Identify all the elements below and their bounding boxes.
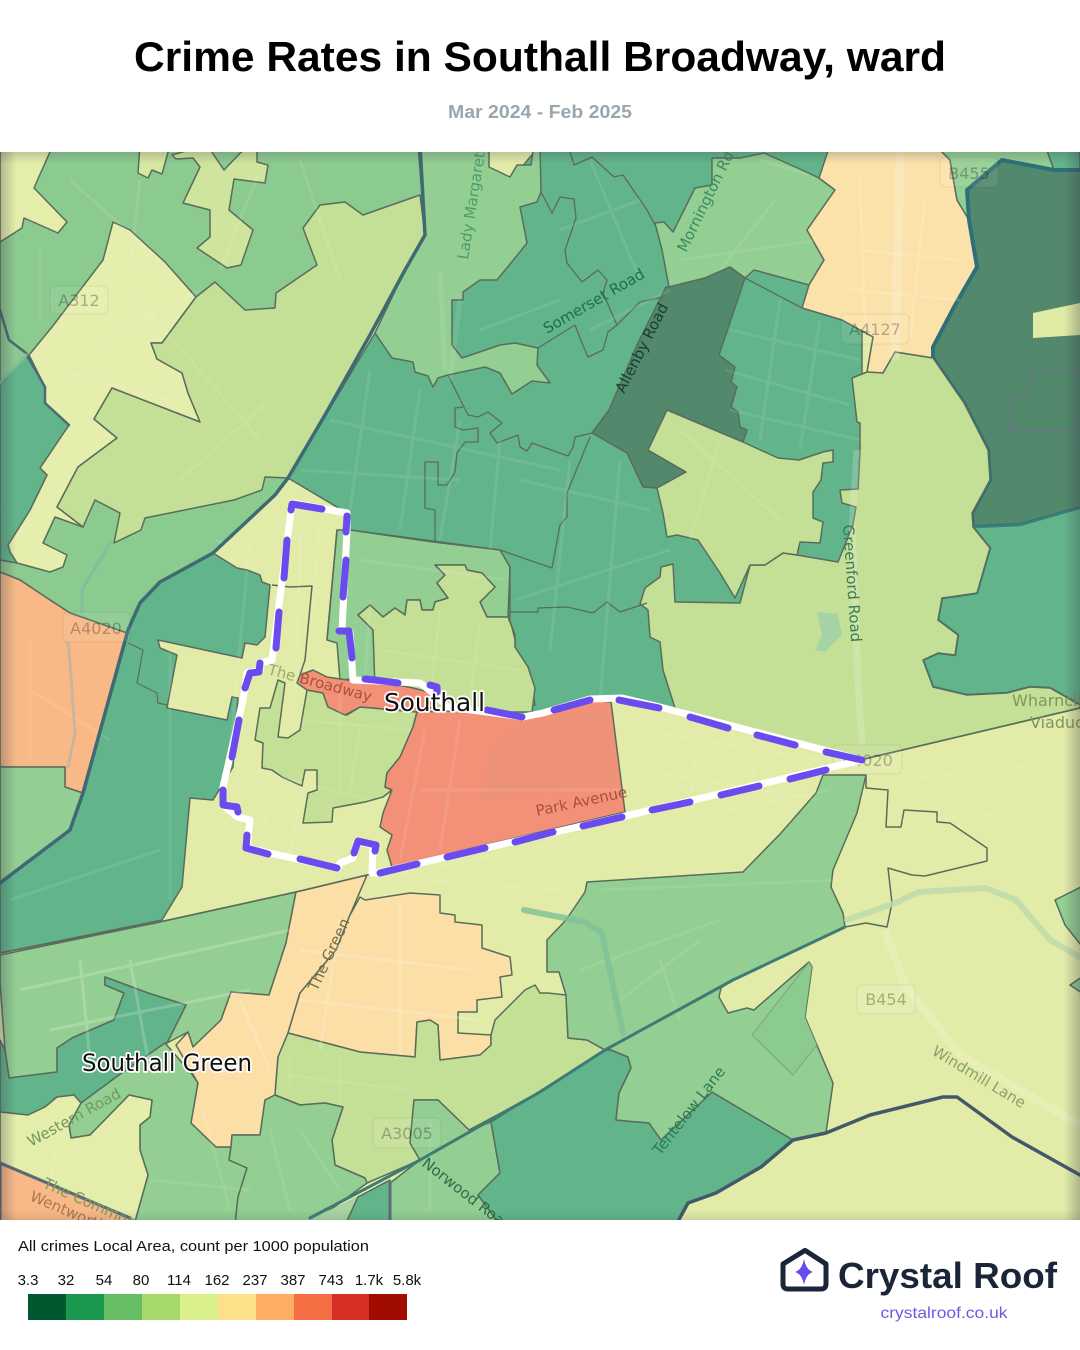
region: The Green peach west — [176, 875, 367, 1147]
region: darker salmon patch — [480, 708, 618, 800]
region: north medium green — [655, 153, 835, 287]
badge: A4020 west — [63, 612, 130, 642]
badge: A4020 west: A4020 — [70, 619, 122, 638]
region: west light-green ward — [57, 195, 425, 543]
road badges — [50, 157, 998, 1148]
region: east edge green — [1055, 885, 1080, 950]
region: south small dark patch — [345, 1180, 390, 1225]
badge: A3005 — [373, 1118, 441, 1148]
region: east light-green park — [640, 352, 1080, 760]
region: south-west dark green — [0, 553, 270, 953]
label: Somerset Road: Somerset Road — [540, 265, 648, 337]
title: Crime Rates in Southall Broadway, ward — [134, 33, 946, 80]
canal and rivers — [0, 145, 1080, 1225]
region: north of ward medium green — [327, 530, 510, 680]
region: north-west medium green — [0, 145, 425, 633]
legend colour bar — [28, 1294, 407, 1320]
region: inner medium darker triangle — [752, 962, 817, 1075]
badge: A4020 east — [833, 745, 902, 774]
region: south-east medium green — [547, 775, 866, 1140]
ward boundary: Southall Broadway — [223, 503, 862, 873]
region: north-central dark green — [288, 145, 862, 717]
region: river-edge sliver — [310, 1192, 366, 1220]
label: The Common: The Common — [39, 1174, 139, 1231]
region: north-east corner green — [1046, 152, 1080, 168]
icon: house with star — [783, 1250, 826, 1289]
boundary: central ward lines — [500, 437, 590, 568]
legend scale values: 54 — [96, 1272, 112, 1289]
legend scale values: 743 — [318, 1272, 344, 1289]
region: south-west lime — [0, 1095, 152, 1225]
legend scale values: 80 — [133, 1272, 149, 1289]
boundary: dark west notch line — [128, 643, 167, 705]
label: The Green: The Green — [304, 915, 354, 995]
wordmark: Crystal Roof — [838, 1255, 1058, 1296]
badge: A3005: A3005 — [381, 1124, 433, 1143]
label: Tentelow Lane: Tentelow Lane — [648, 1063, 729, 1159]
region: east lime outline — [845, 775, 987, 927]
pond: east park — [815, 612, 842, 652]
label: Wharncliffe Viaduct — [1012, 691, 1080, 732]
badge: B455 — [940, 157, 998, 187]
region: B455 medium corner — [941, 152, 1052, 218]
badge: A312: A312 — [58, 291, 100, 310]
legend scale values: 162 — [204, 1272, 230, 1289]
legend scale values: 387 — [280, 1272, 306, 1289]
region: west medium green below orange — [0, 767, 83, 883]
label: Wentworth Road: Wentworth Road — [27, 1187, 149, 1252]
legend scale values: 32 — [58, 1272, 74, 1289]
label: Lady Margaret Road: Lady Margaret — [454, 151, 489, 261]
region: south-west dark green — [0, 977, 186, 1115]
region: central light patch — [648, 410, 833, 598]
label: Park Avenue: Park Avenue — [534, 783, 629, 820]
legend scale values: 1.7k — [355, 1272, 384, 1289]
badge: A4020 east: A4020 — [841, 751, 893, 770]
place label: Southall: Southall — [384, 688, 485, 717]
road labels — [24, 148, 1080, 1252]
region: south-central light green — [275, 985, 605, 1183]
region: The Broadway salmon — [297, 670, 433, 715]
boundary: dark block inner lines — [1010, 372, 1080, 432]
region: east dark block — [933, 160, 1080, 527]
region: west orange ward — [0, 572, 127, 793]
region: north light island — [172, 145, 268, 268]
region: north-west yellow ward — [8, 222, 200, 572]
region: east green band — [923, 505, 1080, 708]
region: north of ward light green — [358, 565, 535, 712]
region: south medium green — [229, 1095, 367, 1225]
legend scale values: 114 — [167, 1272, 191, 1289]
region: south-central dark green — [478, 1050, 793, 1225]
region: north-central medium strip — [375, 145, 550, 394]
region: Norwood medium green — [390, 1100, 500, 1225]
region: Southall Green medium green — [69, 1043, 247, 1225]
legend scale values: 3.3 — [18, 1272, 38, 1289]
logo: Crystal Roof — [783, 1250, 1058, 1322]
region: far-west green — [0, 355, 69, 563]
roads: faint street network — [10, 152, 1080, 1210]
region: north yellow island — [137, 152, 169, 179]
label: Allenby Road: Allenby Road — [612, 300, 672, 396]
region: north-east peach ward — [802, 145, 977, 373]
region: south-west orange — [0, 1162, 132, 1220]
legend scale values — [18, 1272, 422, 1289]
legend scale values: 237 — [242, 1272, 268, 1289]
region: The Green peach east — [288, 893, 512, 1060]
boundary: ward inner lines — [272, 585, 312, 675]
region: south-west medium green — [0, 892, 296, 1078]
region: north-west yellow corner — [0, 145, 67, 242]
region: east lime sliver — [1033, 303, 1080, 338]
badge: A4127 — [841, 314, 909, 344]
legend title: All crimes Local Area, count per 1000 population — [18, 1238, 369, 1255]
label: Greenford Road: Greenford Road — [839, 524, 865, 643]
badge: A4127: A4127 — [849, 320, 901, 339]
place label: Southall Green: Southall Green — [82, 1049, 252, 1077]
badge: A312 — [50, 286, 108, 314]
label: Windmill Lane: Windmill Lane — [929, 1042, 1029, 1112]
label: Western Road: Western Road — [24, 1084, 124, 1150]
region: Southall Broadway salmon block — [380, 700, 625, 867]
legend — [18, 1238, 422, 1320]
vignette edges — [0, 152, 1080, 1220]
subtitle: date range: Mar 2024 - Feb 2025 — [448, 102, 632, 122]
region: The Broadway light green — [255, 680, 417, 823]
badge: B454: B454 — [865, 990, 907, 1009]
legend scale values: 5.8k — [393, 1272, 422, 1289]
label: The Broadway: The Broadway — [265, 660, 374, 706]
badge: B454 — [857, 985, 915, 1014]
badge: B455: B455 — [948, 164, 990, 183]
label: Mornington Road: Mornington Rd — [673, 148, 738, 255]
label: Norwood Road: Norwood Road — [419, 1154, 516, 1235]
region: Allenby Road dark wedge — [592, 267, 747, 488]
website url: crystalroof.co.uk — [880, 1305, 1009, 1322]
